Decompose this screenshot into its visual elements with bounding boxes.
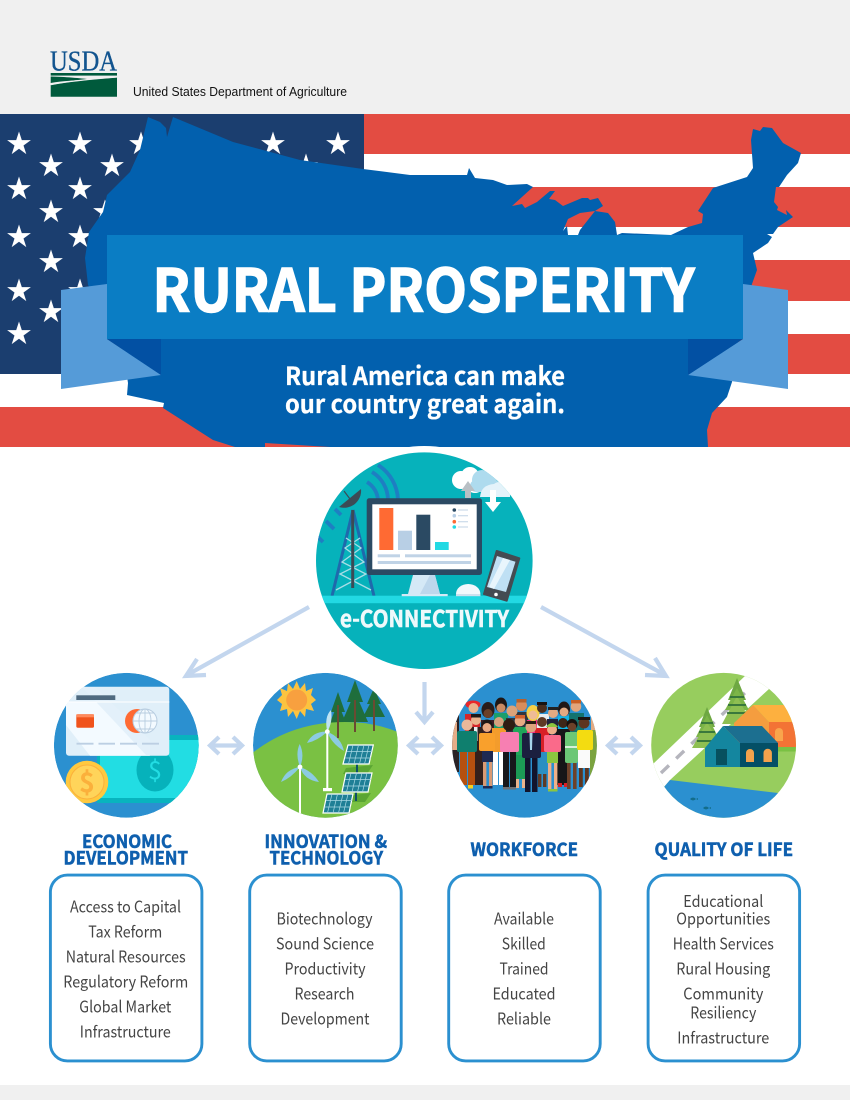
monitor: [367, 498, 482, 596]
panel: innovation and technology list: Research: [294, 981, 354, 1005]
heading: workforce: WORKFORCE: [471, 836, 578, 862]
panel: innovation and technology list: Sound Science: [276, 931, 374, 955]
heading: economic development: ECONOMIC: [82, 828, 172, 854]
arrow: economic development and innovation: [210, 737, 242, 754]
circle: workforce: [450, 673, 599, 818]
person: teal sweater: [457, 720, 477, 788]
panel: quality of life list: Opportunities: [676, 906, 770, 930]
heading: economic development: DEVELOPMENT: [64, 844, 188, 870]
banner: left ribbon end: [61, 284, 161, 389]
panel: quality of life list: Resiliency: [690, 1000, 757, 1024]
panel: economic development list: Infrastructure: [80, 1019, 171, 1043]
subtitle: our country great again.: [285, 385, 565, 421]
front row of people: [457, 717, 593, 792]
subtitle: Rural America can make: [285, 357, 565, 393]
heading: economic development: [64, 828, 188, 870]
banknote: $: [148, 751, 162, 787]
cloud: [452, 467, 510, 512]
trees: [692, 678, 752, 748]
panel: economic development list: Access to Capital: [70, 894, 181, 918]
subtitle: [285, 357, 565, 421]
person: yellow top: [577, 717, 593, 787]
agency name: United States Department of Agriculture: [133, 85, 347, 99]
panel: workforce list: Skilled: [502, 931, 546, 955]
dome: [456, 584, 480, 594]
circle: innovation and technology: [250, 673, 400, 820]
heading: innovation and technology: TECHNOLOGY: [270, 844, 384, 870]
person: orange top: [479, 720, 493, 788]
panel: quality of life list: Infrastructure: [677, 1025, 769, 1049]
panel: workforce list: [449, 875, 600, 1061]
panel: quality of life list: Educational: [683, 888, 763, 912]
panel: quality of life list: Rural Housing: [676, 956, 770, 980]
panel: workforce list: Reliable: [497, 1006, 551, 1030]
panel: workforce list: Educated: [492, 981, 556, 1005]
white halo behind e-connectivity: [308, 446, 540, 678]
arrow: to quality of life: [541, 607, 666, 676]
circle: e-connectivity: [315, 452, 536, 669]
panel: innovation and technology list: Productivity: [284, 956, 366, 980]
banknote: [97, 735, 210, 803]
side figures: [452, 714, 597, 776]
coin: $: [79, 761, 95, 800]
heading: quality of life: QUALITY OF LIFE: [655, 836, 793, 862]
tower: [332, 489, 374, 596]
panel: quality of life list: [648, 875, 800, 1061]
flag backdrop: [0, 114, 850, 447]
hill: [250, 722, 400, 820]
map of the United States: [85, 117, 801, 447]
person: green dress: [565, 719, 578, 789]
footer band: [0, 1085, 850, 1100]
heading: innovation and technology: [265, 828, 387, 870]
title: RURAL PROSPERITY: [152, 244, 695, 328]
arrow: down to workforce: [416, 682, 433, 722]
arrow: to economic development: [186, 607, 309, 676]
panel: quality of life list: Health Services: [673, 931, 774, 955]
circle: economic development: [54, 673, 210, 818]
panel: innovation and technology list: [250, 875, 401, 1061]
middle row of people: [469, 714, 570, 788]
panel: workforce list: Available: [494, 906, 554, 930]
panel: innovation and technology list: Biotechnology: [276, 906, 373, 930]
USDA logo: [50, 46, 118, 97]
orange house: [734, 705, 796, 752]
heading: innovation and technology: INNOVATION &: [265, 828, 387, 854]
trees: [330, 680, 385, 723]
panel: workforce list: Trained: [500, 956, 548, 980]
panel: quality of life list: Community: [683, 981, 764, 1005]
panel: economic development list: Tax Reform: [88, 919, 162, 943]
person: navy suit: [522, 721, 541, 792]
sun: [277, 681, 316, 719]
ground band: [316, 596, 536, 603]
credit card: [66, 687, 169, 756]
person: pink top: [500, 719, 519, 790]
arrow: innovation and workforce: [409, 737, 441, 754]
solar panels: [323, 745, 373, 813]
panel: economic development list: Regulatory Reform: [63, 969, 188, 993]
coin: [66, 761, 108, 803]
USDA logo: USDA: [50, 46, 118, 78]
banner: [107, 235, 743, 339]
banner: right ribbon end: [688, 284, 788, 389]
person: pink top green shorts: [544, 723, 561, 792]
panel: economic development list: Global Market: [79, 994, 171, 1018]
circle: quality of life: [651, 672, 796, 818]
landscape: [651, 672, 796, 818]
header band: [0, 0, 850, 114]
arrow: workforce and quality of life: [608, 737, 640, 754]
back row of people: [465, 698, 584, 735]
panel: economic development list: Natural Resources: [66, 944, 186, 968]
panel: economic development list: [50, 875, 202, 1061]
panel: innovation and technology list: Development: [280, 1006, 370, 1030]
e-connectivity label: e-CONNECTIVITY: [340, 600, 510, 634]
phone: [484, 551, 519, 601]
wind turbines: [281, 710, 344, 819]
tree trunks: [338, 700, 374, 738]
blue house: [705, 726, 778, 767]
signal arcs: [315, 465, 398, 542]
